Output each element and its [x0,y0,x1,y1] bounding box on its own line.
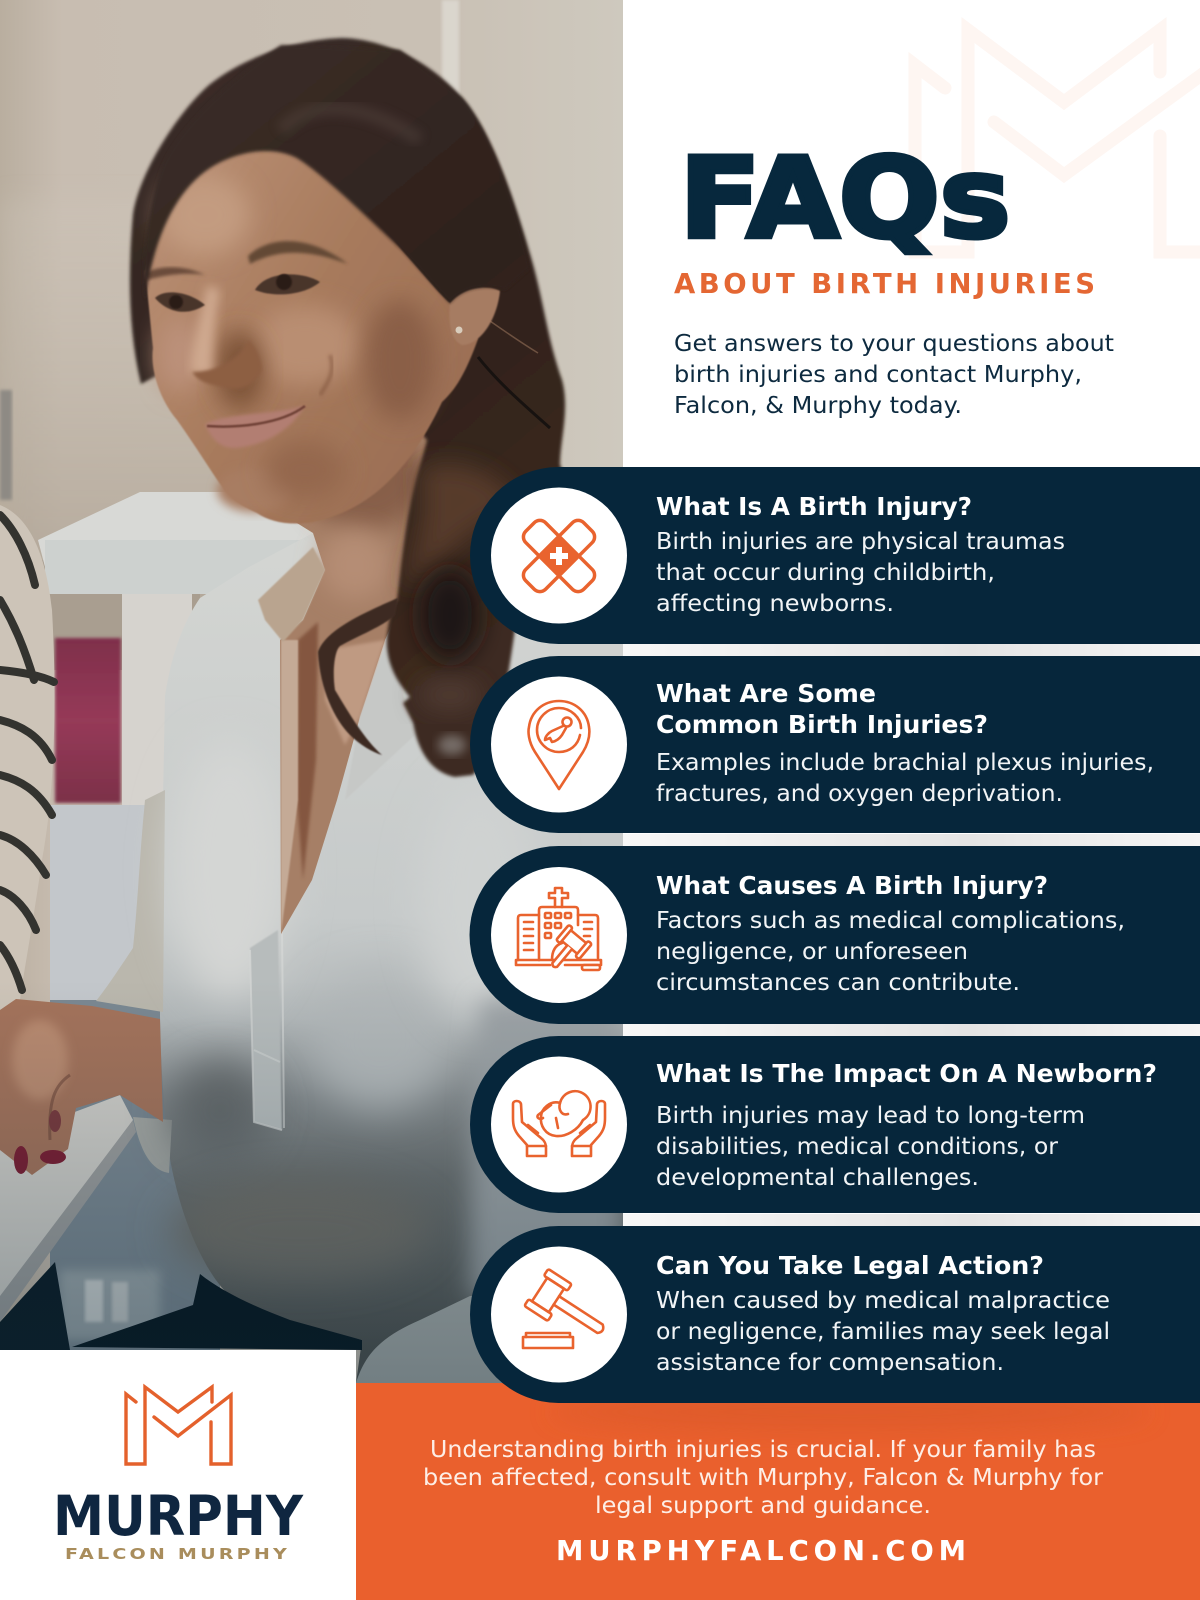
blouse [96,533,623,1383]
panel: common birth injuries [470,656,1200,833]
hand resting on desk [0,999,163,1175]
icon: bandage [520,517,598,595]
footer band [356,1383,1200,1600]
body text [656,1101,1085,1191]
website url: MURPHYFALCON.COM [556,1535,966,1567]
logo mark [126,1387,231,1464]
body text: circumstances can contribute. [656,968,1020,996]
front hair sweep [144,45,530,303]
heading: What Is A Birth Injury? [656,492,972,521]
heading: Common Birth Injuries? [656,710,988,739]
body text: or negligence, families may seek legal [656,1317,1110,1345]
body text: Examples include brachial plexus injuries, [656,748,1154,776]
eyebrows [145,267,205,280]
icon: hands holding baby [513,1091,605,1156]
icon: hospital and gavel [516,888,601,976]
body text: assistance for compensation. [656,1348,1004,1376]
heading: What Are Some [656,679,876,708]
intro text block: Falcon, & Murphy today. [674,391,962,419]
shadow gaps between panels [623,644,1200,1226]
heading: What Causes A Birth Injury? [656,871,1048,900]
intro text block [674,329,1114,419]
dark trousers [72,1274,362,1350]
body text: Birth injuries may lead to long-term [656,1101,1085,1129]
body text: disabilities, medical conditions, or [656,1132,1058,1160]
panel: what is a birth injury [470,467,1200,644]
striped sleeve of neighbouring person [0,505,55,1010]
photo: smiling woman in white blouse [0,0,623,1390]
body text: that occur during childbirth, [656,558,995,586]
eyes [155,292,205,312]
logo wordmark: MURPHY [53,1484,304,1548]
neck and chest [280,435,428,934]
body text: When caused by medical malpractice [656,1286,1110,1314]
body text: affecting newborns. [656,589,894,617]
icon: gavel [523,1269,614,1349]
body text: Factors such as medical complications, [656,906,1125,934]
navy photo tint [0,1030,623,1383]
ear [449,287,500,345]
icon: location pin with baby [529,701,589,789]
hair tones [405,321,550,755]
footer text: Understanding birth injuries is crucial. If your family has [430,1435,1096,1463]
intro text block: birth injuries and contact Murphy, [674,360,1082,388]
title: FAQs: FAQs [680,134,1010,264]
heading [656,679,988,739]
intro text block: Get answers to your questions about [674,329,1114,357]
logo tagline: FALCON MURPHY [65,1545,290,1563]
logo panel [0,1350,356,1600]
panel: causes [470,846,1200,1024]
heading: Can You Take Legal Action? [656,1251,1044,1280]
smile [205,405,305,448]
foreground desk [0,1095,133,1300]
footer text: legal support and guidance. [595,1491,931,1519]
body text: Birth injuries are physical traumas [656,527,1065,555]
subtitle: ABOUT BIRTH INJURIES [674,268,1095,300]
body text: developmental challenges. [656,1163,979,1191]
panel: legal action [470,1226,1200,1403]
body text: fractures, and oxygen deprivation. [656,779,1063,807]
watermark logo [915,30,1200,252]
body text [656,748,1154,807]
footer text: been affected, consult with Murphy, Falcon & Murphy for [423,1463,1103,1491]
body text [656,906,1125,996]
body text: negligence, or unforeseen [656,937,968,965]
body text [656,527,1065,617]
hair lock over chest [318,598,398,755]
hair back [130,38,565,777]
shirt collar [258,547,413,736]
footer text [423,1435,1103,1519]
body text [656,1286,1110,1376]
chest shadow strip [297,622,318,880]
panel: impact on a newborn [470,1036,1200,1213]
heading: What Is The Impact On A Newborn? [656,1059,1157,1088]
face [145,145,500,524]
